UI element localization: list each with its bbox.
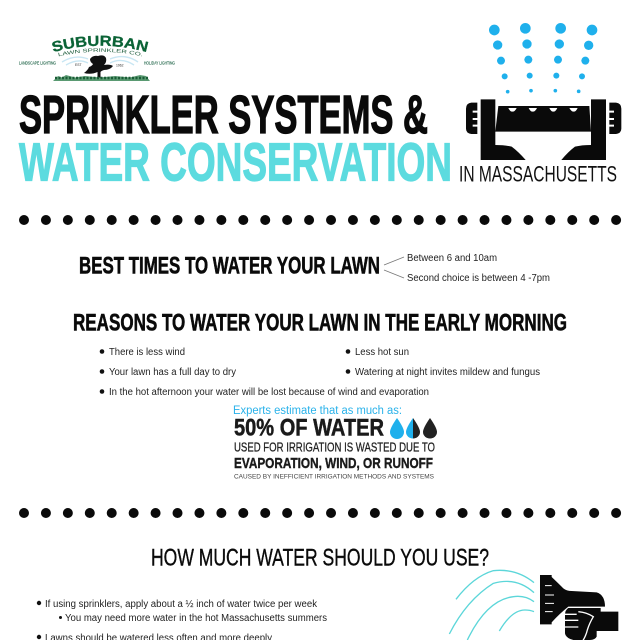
callout: 50 percent of water wasted: EVAPORATION, WIND, OR RUNOFF: [234, 455, 433, 472]
logo: Suburban Lawn Sprinkler Co: LANDSCAPE LIGHTING: [19, 60, 56, 66]
callout: best times branches: [384, 253, 550, 284]
list: reasons: There is less wind: [109, 347, 185, 358]
callout: 50 percent of water wasted: CAUSED BY INEFFICIENT IRRIGATION METHODS AND SYSTEMS: [234, 474, 435, 480]
divider dots top: [24, 215, 617, 225]
title line 1: SPRINKLER SYSTEMS &: [19, 85, 428, 145]
icon: sprinkler head with water spray: [466, 23, 621, 160]
logo: Suburban Lawn Sprinkler Co: 1962: [116, 64, 124, 68]
logo: Suburban Lawn Sprinkler Co: SUBURBAN: [52, 36, 148, 52]
logo: Suburban Lawn Sprinkler Co: EST: [75, 63, 82, 67]
icon: hand holding hose with water arcs: [449, 570, 618, 640]
list: reasons: Your lawn has a full day to dry: [109, 367, 236, 378]
logo: Suburban Lawn Sprinkler Co: [19, 36, 175, 81]
divider dots bottom: [24, 508, 617, 518]
heading: best times: BEST TIMES TO WATER YOUR LAWN: [79, 252, 380, 280]
heading: how much water: HOW MUCH WATER SHOULD YOU USE?: [151, 544, 489, 572]
callout: 50 percent of water wasted: 50% OF WATER: [234, 414, 384, 442]
list: reasons: [100, 347, 540, 398]
list: how much water: [37, 599, 327, 640]
list: how much water: You may need more water in the hot Massachusetts summers: [65, 613, 327, 624]
callout: 50 percent of water wasted: Experts estimate that as much as:: [233, 405, 402, 417]
title line 2: WATER CONSERVATION: [19, 132, 452, 192]
list: reasons: Less hot sun: [355, 347, 409, 358]
callout: 50 percent of water wasted: [233, 405, 437, 480]
list: reasons: Watering at night invites mildew and fungus: [355, 367, 540, 378]
list: how much water: If using sprinklers, apply about a ½ inch of water twice per week: [45, 599, 318, 610]
list: reasons: In the hot afternoon your water will be lost because of wind and evaporation: [109, 387, 429, 398]
callout: 50 percent of water wasted: USED FOR IRRIGATION IS WASTED DUE TO: [234, 440, 435, 454]
logo: Suburban Lawn Sprinkler Co: LAWN SPRINKLER CO.: [58, 48, 142, 56]
logo: Suburban Lawn Sprinkler Co: HOLIDAY LIGHTING: [144, 60, 175, 66]
callout: best times branches: Between 6 and 10am: [407, 253, 497, 264]
callout: best times branches: Second choice is between 4 -7pm: [407, 273, 550, 284]
